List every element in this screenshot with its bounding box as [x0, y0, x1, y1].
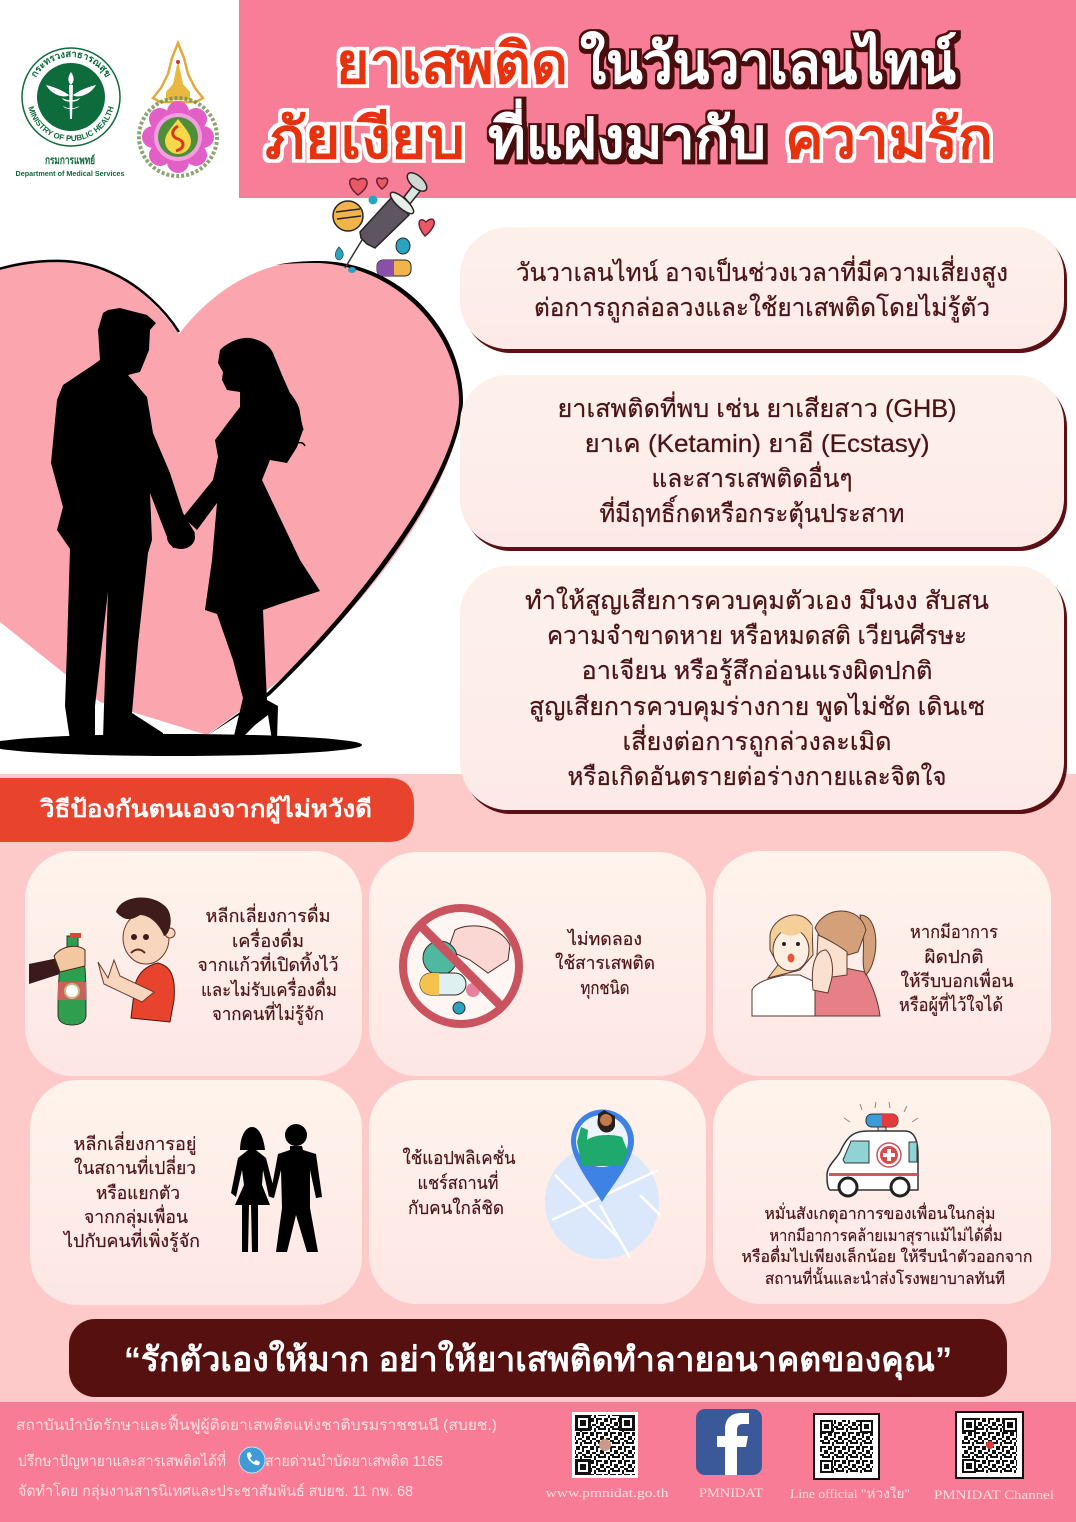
panel: info box 2: ยาเค (Ketamin) ยาอี (Ecstasy)	[584, 430, 930, 458]
clasped hands	[167, 525, 195, 549]
card: tell a friend	[713, 851, 1051, 1076]
panel: info box 3: เสี่ยงต่อการถูกล่วงละเมิด	[622, 724, 892, 757]
header banner	[239, 0, 1076, 198]
card: avoid risky places: ไปกับคนที่เพิ่งรู้จัก	[62, 1228, 200, 1252]
footer text: ปรึกษาปัญหายาและสารเสพติดได้ที่	[18, 1450, 226, 1470]
icon: man and woman silhouettes	[231, 1124, 322, 1252]
icon: two friends whispering	[752, 911, 880, 1016]
icon: phone	[239, 1447, 265, 1473]
quote banner	[69, 1319, 1007, 1397]
card: avoid open drinks: เครื่องดื่ม	[232, 928, 304, 951]
card: avoid risky places: จากกลุ่มเพื่อน	[84, 1204, 188, 1228]
panel: info box 3: ทำให้สูญเสียการควบคุมตัวเอง มึนงง สับสน	[525, 586, 989, 616]
icon: syringe and pills	[333, 170, 434, 276]
QR: Line official	[814, 1414, 879, 1479]
title: ในวันวาเลนไทน์	[580, 30, 957, 96]
icon: Facebook	[696, 1409, 762, 1475]
title: ภัยเงียบ	[265, 107, 465, 171]
heart illustration	[0, 260, 463, 735]
QR labels: PMNIDAT	[699, 1485, 763, 1500]
panel: info box 1: วันวาเลนไทน์ อาจเป็นช่วงเวลาที่มีความเสี่ยงสูง	[516, 255, 1008, 288]
card: share location: ใช้แอปพลิเคชั่น	[402, 1145, 516, 1168]
title: ยาเสพติด	[336, 32, 568, 96]
QR: website	[572, 1412, 638, 1478]
icon: refusing a bottle	[29, 897, 175, 1025]
title	[265, 30, 993, 171]
couple silhouette	[0, 308, 362, 756]
panel: info box 3: ความจำขาดหาย หรือหมดสติ เวียนศีรษะ	[547, 622, 967, 650]
panel: info box 2: ยาเสพติดที่พบ เช่น ยาเสียสาว (GHB)	[558, 391, 956, 423]
icon: map pin with person	[545, 1110, 660, 1259]
panel: info box 1: ต่อการถูกล่อลวงและใช้ยาเสพติดโดยไม่รู้ตัว	[534, 293, 990, 323]
heading: prevention: วิธีป้องกันตนเองจากผู้ไม่หวังดี	[39, 794, 372, 824]
panel: info box 1	[460, 227, 1067, 353]
card: avoid risky places: หลีกเลี่ยงการอยู่	[74, 1131, 196, 1155]
woman	[183, 338, 320, 740]
card: do not try: ใช้สารเสพติด	[555, 952, 655, 973]
title: ที่แฝงมากับ	[488, 98, 766, 171]
card: tell a friend: หรือผู้ที่ไว้ใจได้	[899, 992, 1003, 1016]
logo: Ministry of Public Health	[16, 47, 125, 178]
card: avoid open drinks: หลีกเลี่ยงการดื่ม	[206, 903, 330, 926]
card: avoid risky places	[30, 1080, 362, 1305]
card: do not try	[369, 852, 706, 1076]
footer	[0, 1402, 1076, 1522]
panel: info box 2	[460, 375, 1067, 551]
man	[51, 308, 195, 740]
card: tell a friend: ให้รีบบอกเพื่อน	[900, 968, 1014, 991]
title: ความรัก	[785, 107, 993, 171]
panel: info box 3	[460, 566, 1067, 814]
card: share location	[369, 1080, 706, 1304]
panel: info box 3: หรือเกิดอันตรายต่อร่างกายและจิตใจ	[568, 762, 946, 791]
card: watch friends: หรือดื่มไปเพียงเล็กน้อย ให้รีบนำตัวออกจาก	[742, 1245, 1032, 1266]
QR: PMNIDAT Channel	[956, 1412, 1023, 1478]
ground shadow	[0, 734, 362, 756]
card: watch friends: หมั่นสังเกตุอาการของเพื่อนในกลุ่ม	[764, 1202, 996, 1224]
panel: info box 2: และสารเสพติดอื่นๆ	[652, 461, 852, 493]
footer text: สถาบันบำบัดรักษาและฟื้นฟูผู้ติดยาเสพติดแห่งชาติบรมราชชนนี (สบยช.)	[16, 1414, 497, 1434]
panel: info box 3: อาเจียน หรือรู้สึกอ่อนแรงผิดปกติ	[582, 657, 932, 686]
card: avoid open drinks	[25, 851, 362, 1076]
background: lower pink section	[0, 774, 1076, 1402]
card: watch friends	[713, 1080, 1051, 1304]
QR labels: PMNIDAT Channel	[934, 1487, 1054, 1502]
footer text: จัดทำโดย กลุ่มงานสารนิเทศและประชาสัมพันธ์ สบยช. 11 กพ. 68	[18, 1482, 413, 1501]
QR labels	[546, 1485, 1054, 1502]
card: avoid open drinks: จากแก้วที่เปิดทิ้งไว้	[198, 952, 338, 975]
logo: Ministry of Public Health: Department of Medical Services	[16, 171, 125, 178]
logo: Ministry of Public Health: กระทรวงสาธารณสุข	[32, 51, 110, 78]
QR labels: Line official "ห่วงใย"	[790, 1486, 910, 1501]
card: avoid risky places: หรือแยกตัว	[96, 1183, 180, 1203]
panel: info box 3: สูญเสียการควบคุมร่างกาย พูดไม่ชัด เดินเซ	[529, 692, 985, 722]
footer text	[16, 1414, 497, 1501]
heading: prevention	[0, 778, 414, 842]
card: avoid risky places: ในสถานที่เปลี่ยว	[74, 1155, 196, 1178]
logo: institute emblem	[139, 43, 217, 176]
quote banner: “รักตัวเองให้มาก อย่าให้ยาเสพติดทำลายอนาคตของคุณ”	[124, 1339, 952, 1381]
icon: ambulance	[827, 1102, 918, 1196]
card: share location: แชร์สถานที่	[418, 1170, 498, 1193]
logo: Ministry of Public Health: MINISTRY OF PUBLIC HEALTH	[28, 106, 114, 141]
hair curls	[288, 405, 305, 446]
footer text: สายด่วนบำบัดยาเสพติด 1165	[265, 1453, 443, 1470]
panel: info box 2: ที่มีฤทธิ์กดหรือกระตุ้นประสาท	[600, 495, 904, 529]
icon: no drugs sign	[401, 906, 521, 1026]
QR labels: www.pmnidat.go.th	[546, 1485, 669, 1500]
card: do not try: ทุกชนิด	[580, 978, 630, 999]
card: watch friends: หากมีอาการคล้ายเมาสุราแม้ไม่ได้ดื่ม	[770, 1224, 1002, 1246]
card: avoid open drinks: และไม่รับเครื่องดื่ม	[201, 977, 337, 1000]
logo: Ministry of Public Health: กรมการแพทย์	[45, 154, 95, 167]
card: tell a friend: ผิดปกติ	[924, 947, 984, 967]
card: do not try: ไม่ทดลอง	[566, 928, 642, 949]
card: avoid open drinks: จากคนที่ไม่รู้จัก	[212, 1001, 324, 1025]
card: watch friends: สถานที่นั้นและนำส่งโรงพยาบาลทันที	[765, 1267, 1005, 1288]
card: share location: กับคนใกล้ชิด	[408, 1197, 504, 1218]
card: tell a friend: หากมีอาการ	[910, 922, 998, 942]
